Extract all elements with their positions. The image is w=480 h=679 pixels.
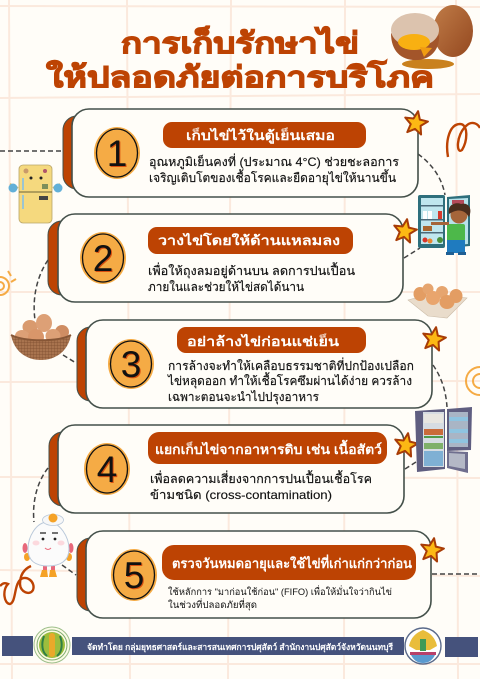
icon: star xyxy=(392,217,418,243)
heading 3: อย่าล้างไข่ก่อนแช่เย็น xyxy=(187,332,339,349)
number 3: 3 xyxy=(122,345,142,386)
icon: cracked eggs xyxy=(391,5,473,69)
heading 1 xyxy=(163,122,366,148)
footer text: จัดทำโดย กลุ่มยุทธศาสตร์และสารสนเทศการปศุสัตว์ สำนักงานปศุสัตว์จังหวัดนนทบุรี xyxy=(87,642,393,653)
number 4: 4 xyxy=(97,449,117,490)
icon: star xyxy=(421,325,447,351)
number 5: 5 xyxy=(124,555,144,596)
heading 4: แยกเก็บไข่จากอาหารดิบ เช่น เนื้อสัตว์ xyxy=(155,439,382,457)
title: ให้ปลอดภัยต่อการบริโภค xyxy=(46,59,434,94)
text 3: เฉพาะตอนจะนำไปปรุงอาหาร xyxy=(168,390,320,405)
title: การเก็บรักษาไข่ xyxy=(121,25,359,60)
text 2 xyxy=(148,262,355,294)
number 5 xyxy=(111,549,157,601)
heading 1: เก็บไข่ไว้ในตู้เย็นเสมอ xyxy=(186,126,335,144)
heading 5 xyxy=(162,545,416,580)
number 1: 1 xyxy=(107,133,127,174)
panel: step 1 xyxy=(63,109,429,197)
icon: egg character xyxy=(22,514,74,577)
number 3 xyxy=(108,339,154,389)
text 1: เจริญเติบโตของเชื้อโรคและยืดอายุไข่ให้นานขึ้น xyxy=(149,169,396,186)
icon: star xyxy=(403,109,429,135)
icon: star xyxy=(393,431,419,457)
logo: right xyxy=(405,628,441,664)
text 3: การล้างจะทำให้เคลือบธรรมชาติที่ปกป้องเปลือก xyxy=(168,357,414,373)
heading 3 xyxy=(177,327,366,353)
panel: step 4 xyxy=(49,425,419,513)
text 5: ในช่วงที่ปลอดภัยที่สุด xyxy=(168,598,257,611)
number 5: 5 xyxy=(125,556,145,597)
number 2: 2 xyxy=(94,239,114,280)
text 4 xyxy=(150,470,372,502)
text 2: ภายในและช่วยให้ไข่สดได้นาน xyxy=(148,280,304,294)
title xyxy=(46,25,434,94)
text 4: ข้ามชนิด (cross-contamination) xyxy=(150,488,332,502)
icon: child at open fridge xyxy=(418,195,470,255)
panel: step 2 xyxy=(48,214,418,302)
text 4: เพื่อลดความเสี่ยงจากการปนเปื้อนเชื้อโรค xyxy=(150,470,372,486)
text 5: ใช้หลักการ "มาก่อนใช้ก่อน" (FIFO) เพื่อให้มั่นใจว่ากินไข่ xyxy=(168,585,392,598)
icon: egg basket xyxy=(11,314,71,360)
heading 5: ตรวจวันหมดอายุและใช้ไข่ที่เก่าแก่กว่าก่อน xyxy=(172,554,412,572)
dashed connectors xyxy=(0,151,480,575)
icon: open fridge xyxy=(415,407,472,473)
text 3 xyxy=(167,357,414,405)
decorative squiggles xyxy=(0,123,480,604)
heading 4 xyxy=(148,432,387,464)
text 3: ไข่หลุดออก ทำให้เชื้อโรคซึมผ่านได้ง่าย ควรล้าง xyxy=(167,372,412,389)
number 2 xyxy=(80,232,126,284)
number 1 xyxy=(94,127,140,179)
footer bar xyxy=(2,636,478,657)
panel: step 5 xyxy=(77,531,445,618)
icon: star xyxy=(419,536,445,562)
number 4 xyxy=(84,443,130,495)
icon: fridge character xyxy=(8,165,62,223)
panel: step 3 xyxy=(77,320,447,408)
text 5 xyxy=(168,585,392,611)
icon: egg tray xyxy=(408,284,467,318)
heading 2 xyxy=(148,227,353,254)
heading 2: วางไข่โดยให้ด้านแหลมลง xyxy=(158,232,340,248)
number 4: 4 xyxy=(98,450,118,491)
number 1: 1 xyxy=(108,134,128,175)
text 1: อุณหภูมิเย็นคงที่ (ประมาณ 4°C) ช่วยชะลอการ xyxy=(149,153,400,170)
number 3: 3 xyxy=(121,344,141,385)
logo: left xyxy=(34,627,70,663)
text 2: เพื่อให้ถุงลมอยู่ด้านบน ลดการปนเปื้อน xyxy=(148,262,355,279)
text 1 xyxy=(149,153,400,186)
number 2: 2 xyxy=(93,238,113,279)
